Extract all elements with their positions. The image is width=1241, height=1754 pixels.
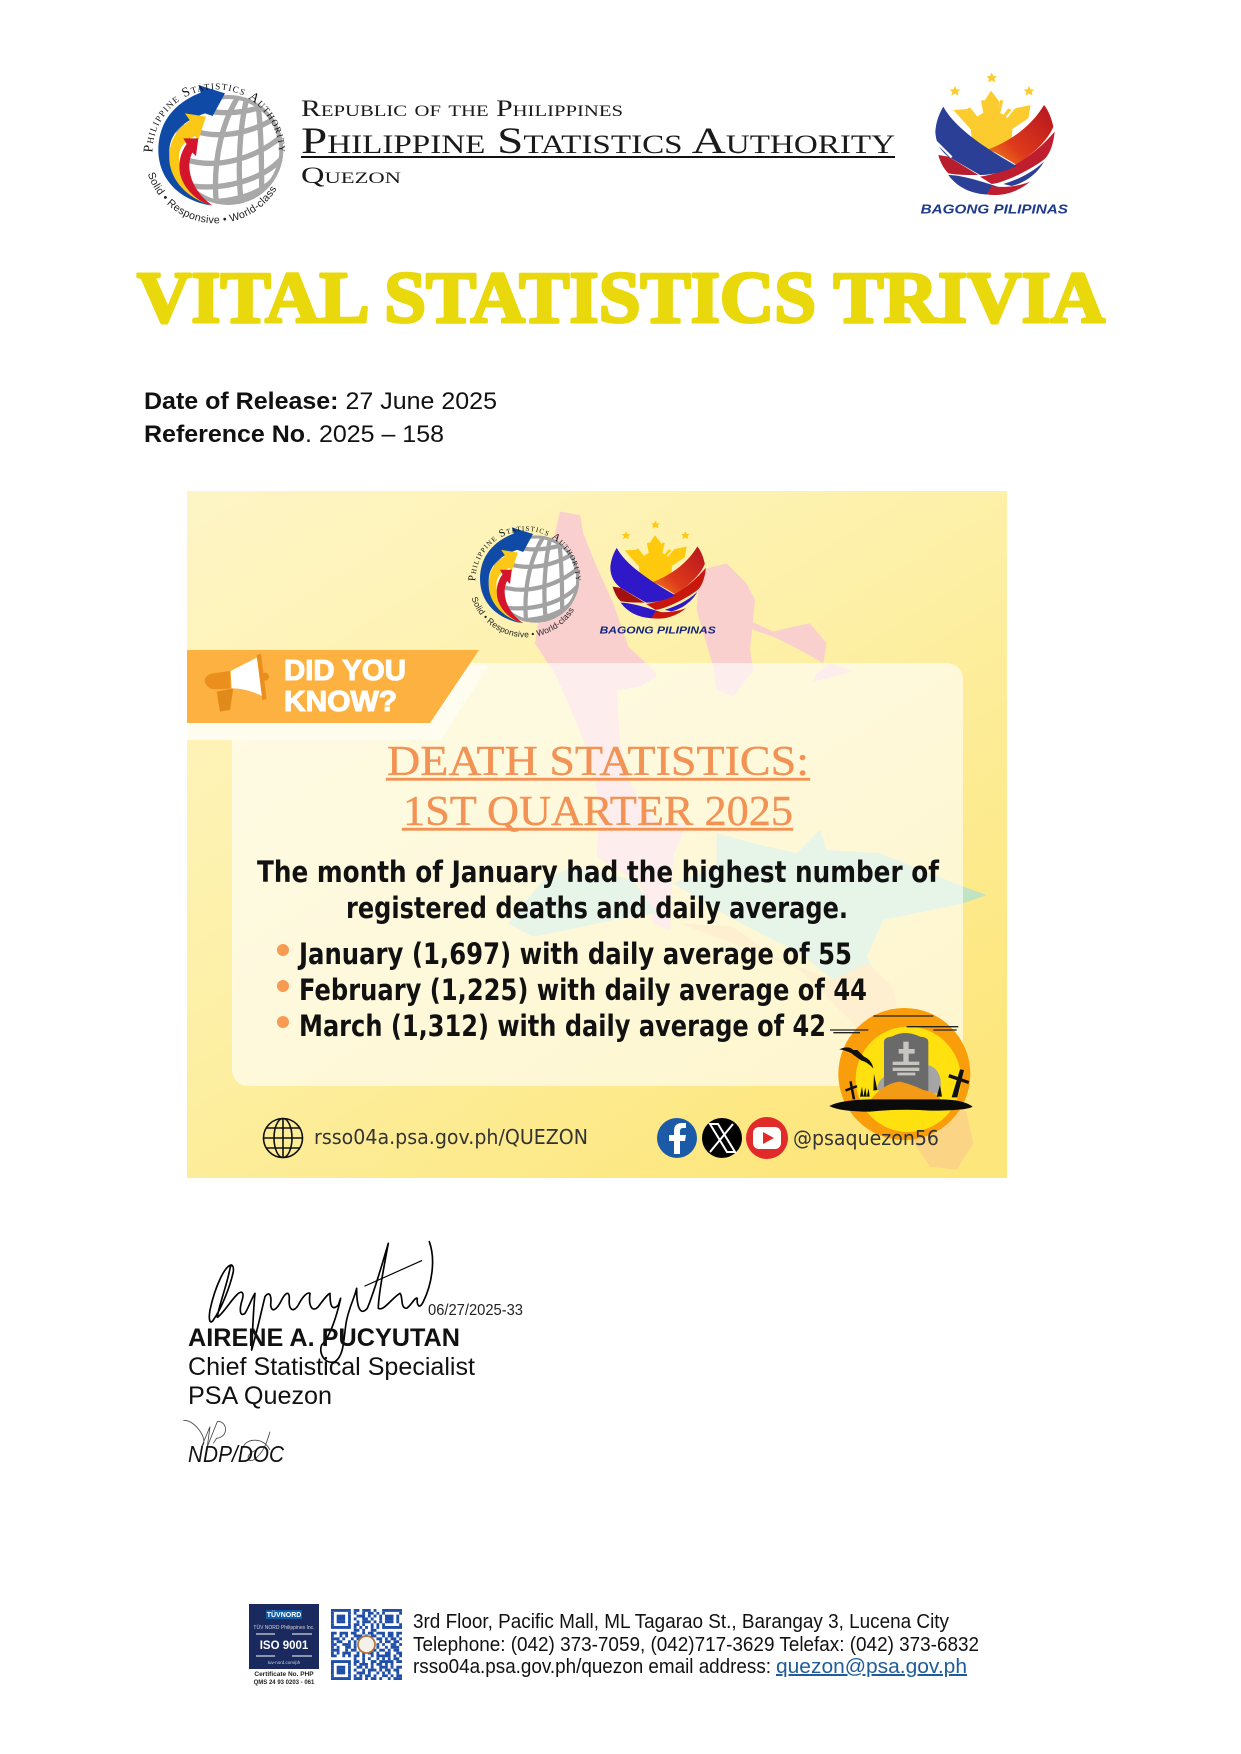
header line: republic: Republic of the Philippines bbox=[301, 96, 623, 121]
certification badge: ISO 9001: Certificate No. PHP bbox=[254, 1671, 314, 1678]
drafter initials: NDP/DOC bbox=[188, 1441, 284, 1467]
panel heading: death statistics: DEATH STATISTICS: bbox=[387, 739, 809, 785]
certification badge: ISO 9001: TÜVNORD bbox=[267, 1610, 301, 1619]
logo: PSA seal in panel: Philippine Statistics Authority bbox=[468, 526, 581, 581]
logo: Philippine Statistics Authority seal bbox=[144, 83, 285, 224]
monthly death list: January (1,697) with daily average of 55 bbox=[297, 937, 852, 971]
certification badge: ISO 9001: TÜV NORD Philippines Inc. bbox=[253, 1624, 315, 1631]
release date and reference number bbox=[144, 388, 497, 448]
banner text: KNOW? bbox=[284, 686, 397, 718]
signatory block: Chief Statistical Specialist bbox=[188, 1353, 475, 1381]
monthly death list: February (1,225) with daily average of 44 bbox=[299, 973, 867, 1007]
header text: agency name bbox=[301, 96, 895, 188]
signature bbox=[209, 1242, 433, 1362]
panel heading: death statistics bbox=[386, 739, 810, 835]
logo: Bagong Pilipinas bbox=[921, 73, 1069, 216]
title: VITAL STATISTICS TRIVIA bbox=[137, 257, 1105, 338]
lead statement: registered deaths and daily average. bbox=[346, 891, 848, 925]
icon: megaphone bbox=[205, 654, 269, 712]
certification badge: ISO 9001: ISO 9001 bbox=[260, 1640, 309, 1652]
QR code bbox=[331, 1610, 402, 1679]
panel: did you know infographic bbox=[187, 491, 1007, 1178]
logo: Bagong Pilipinas: BAGONG PILIPINAS bbox=[921, 202, 1069, 216]
certification badge: ISO 9001: tuv-nord.com/ph bbox=[268, 1660, 301, 1665]
initials signatures bbox=[183, 1420, 270, 1461]
signature timestamp: 06/27/2025-33 bbox=[428, 1302, 523, 1319]
icon: web globe bbox=[264, 1118, 302, 1158]
signatory block: PSA Quezon bbox=[188, 1382, 332, 1410]
logo: PSA seal in panel: Solid • Responsive • World-class bbox=[472, 597, 574, 638]
panel heading: death statistics: 1ST QUARTER 2025 bbox=[403, 789, 793, 835]
icon: X bbox=[702, 1118, 742, 1158]
logo: Philippine Statistics Authority seal: Solid • Responsive • World-class bbox=[148, 172, 276, 224]
banner text bbox=[284, 655, 406, 718]
icon: graveyard tombstone bbox=[829, 1008, 973, 1140]
map of Quezon background bbox=[508, 512, 987, 1170]
logo: Bagong Pilipinas in panel bbox=[600, 521, 716, 636]
logo: Bagong Pilipinas in panel: BAGONG PILIPINAS bbox=[600, 625, 716, 636]
signatory block: AIRENE A. PUCYUTAN bbox=[188, 1324, 460, 1352]
email link: quezon@psa.gov.ph bbox=[776, 1656, 967, 1678]
banner: did you know bbox=[187, 650, 488, 740]
monthly death list bbox=[277, 937, 867, 1043]
lead statement: The month of January had the highest number of bbox=[257, 855, 939, 889]
signatory block bbox=[188, 1324, 475, 1410]
release date and reference number: Date of Release: 27 June 2025 bbox=[144, 388, 497, 415]
footer contact details: 3rd Floor, Pacific Mall, ML Tagarao St., Barangay 3, Lucena City bbox=[413, 1611, 949, 1633]
social handle: @psaquezon56 bbox=[793, 1126, 939, 1150]
header line: agency: Philippine Statistics Authority bbox=[301, 121, 895, 162]
icon: facebook bbox=[657, 1118, 697, 1158]
certification badge: ISO 9001 bbox=[249, 1604, 319, 1686]
monthly death list: March (1,312) with daily average of 42 bbox=[299, 1009, 826, 1043]
footer contact details: rsso04a.psa.gov.ph/quezon email address: bbox=[413, 1656, 771, 1678]
release date and reference number: Reference No. 2025 – 158 bbox=[144, 421, 444, 448]
certification badge: ISO 9001: QMS 24 93 0203 - 061 bbox=[254, 1680, 315, 1686]
website address: rsso04a.psa.gov.ph/QUEZON bbox=[314, 1125, 588, 1149]
banner text: DID YOU bbox=[284, 655, 406, 687]
icon: youtube bbox=[746, 1117, 788, 1159]
footer contact details: Telephone: (042) 373-7059, (042)717-3629 Telefax: (042) 373-6832 bbox=[413, 1634, 979, 1656]
lead statement bbox=[257, 855, 939, 925]
header line: province: Quezon bbox=[301, 163, 402, 188]
footer contact details bbox=[413, 1611, 979, 1678]
logo: Philippine Statistics Authority seal: Philippine Statistics Authority bbox=[144, 83, 285, 152]
content card bbox=[232, 663, 963, 1086]
logo: PSA seal in panel bbox=[468, 526, 581, 638]
